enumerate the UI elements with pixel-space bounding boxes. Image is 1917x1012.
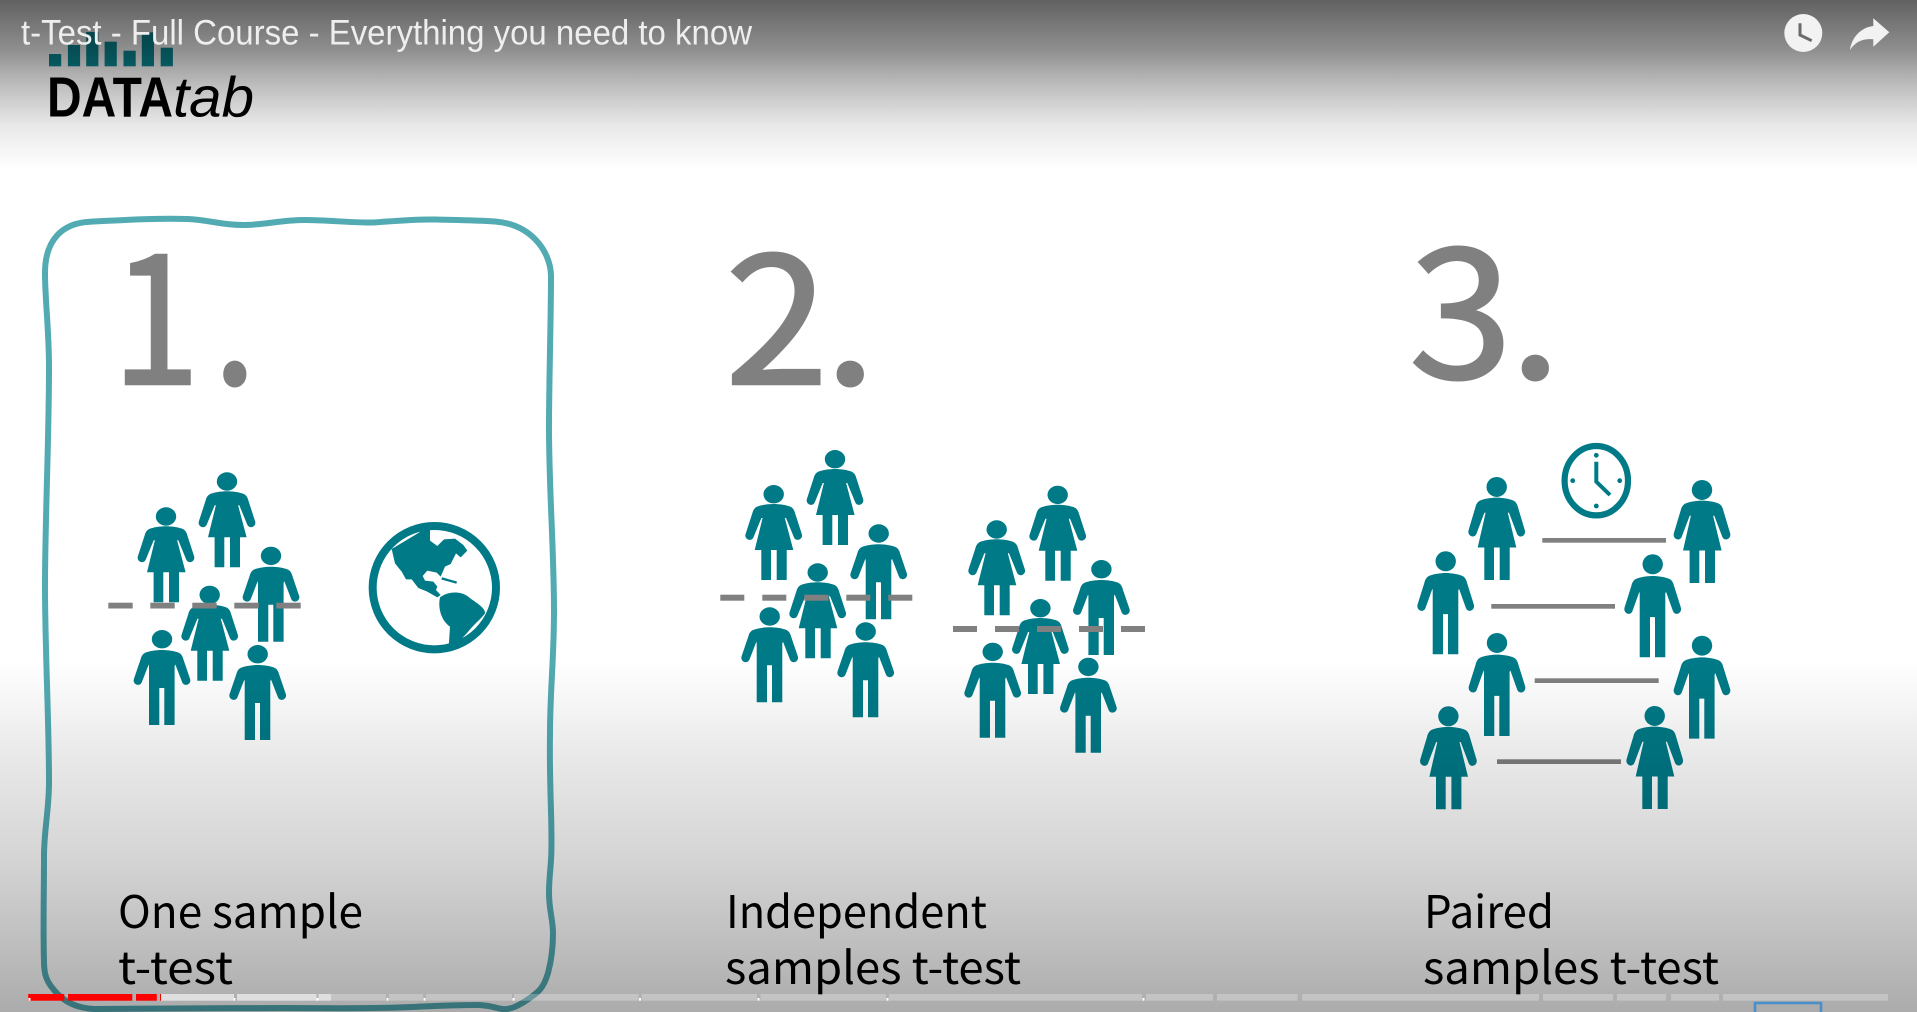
label: paired samples t-test xyxy=(1423,876,1719,997)
label: independent samples t-test xyxy=(725,876,1021,997)
label: one sample t-test xyxy=(118,876,363,997)
dashed mean line xyxy=(108,603,301,608)
label: independent samples t-test: samples t-test xyxy=(725,932,1021,997)
played segments xyxy=(28,994,161,1001)
icon: share arrow xyxy=(1850,18,1889,50)
panel 1: one sample t-test xyxy=(108,181,496,997)
label: one sample t-test: One sample xyxy=(118,876,363,941)
people group: sample A xyxy=(741,450,907,717)
label: paired samples t-test: samples t-test xyxy=(1423,932,1719,997)
number 3: 3. xyxy=(1409,175,1561,429)
icon: clock xyxy=(1565,446,1628,515)
logo wordmark: tab xyxy=(173,66,254,130)
seek position marker xyxy=(1755,1003,1821,1012)
pair connector lines xyxy=(1491,538,1666,764)
icon: watch later clock xyxy=(1784,14,1822,52)
label: one sample t-test: t-test xyxy=(118,932,233,997)
video progress bar xyxy=(28,994,1888,1001)
people group: second measurement xyxy=(1624,480,1730,809)
label: paired samples t-test: Paired xyxy=(1424,876,1554,941)
remaining segments xyxy=(331,994,1888,1001)
panel 2: independent samples t-test xyxy=(720,181,1145,997)
number 2: 2. xyxy=(725,181,876,435)
video title: t-Test - Full Course - Everything you need to know xyxy=(21,13,753,52)
people group: sample xyxy=(134,472,299,740)
icon: globe xyxy=(373,526,496,649)
number 1: 1. xyxy=(112,181,257,436)
label: independent samples t-test: Independent xyxy=(726,876,987,941)
chapter tick marks xyxy=(28,998,1144,1001)
dashed mean line: sample A xyxy=(720,595,912,601)
dashed mean line: sample B xyxy=(953,626,1145,632)
highlight box around panel 1 xyxy=(44,219,554,1009)
logo wordmark: DATA xyxy=(47,66,173,130)
buffered segments xyxy=(161,994,331,1001)
logo bars xyxy=(49,32,173,66)
logo: DATAtab xyxy=(47,32,254,130)
people group: sample B xyxy=(964,486,1130,753)
panel 3: paired samples t-test xyxy=(1409,175,1730,997)
people group: first measurement xyxy=(1417,477,1525,809)
